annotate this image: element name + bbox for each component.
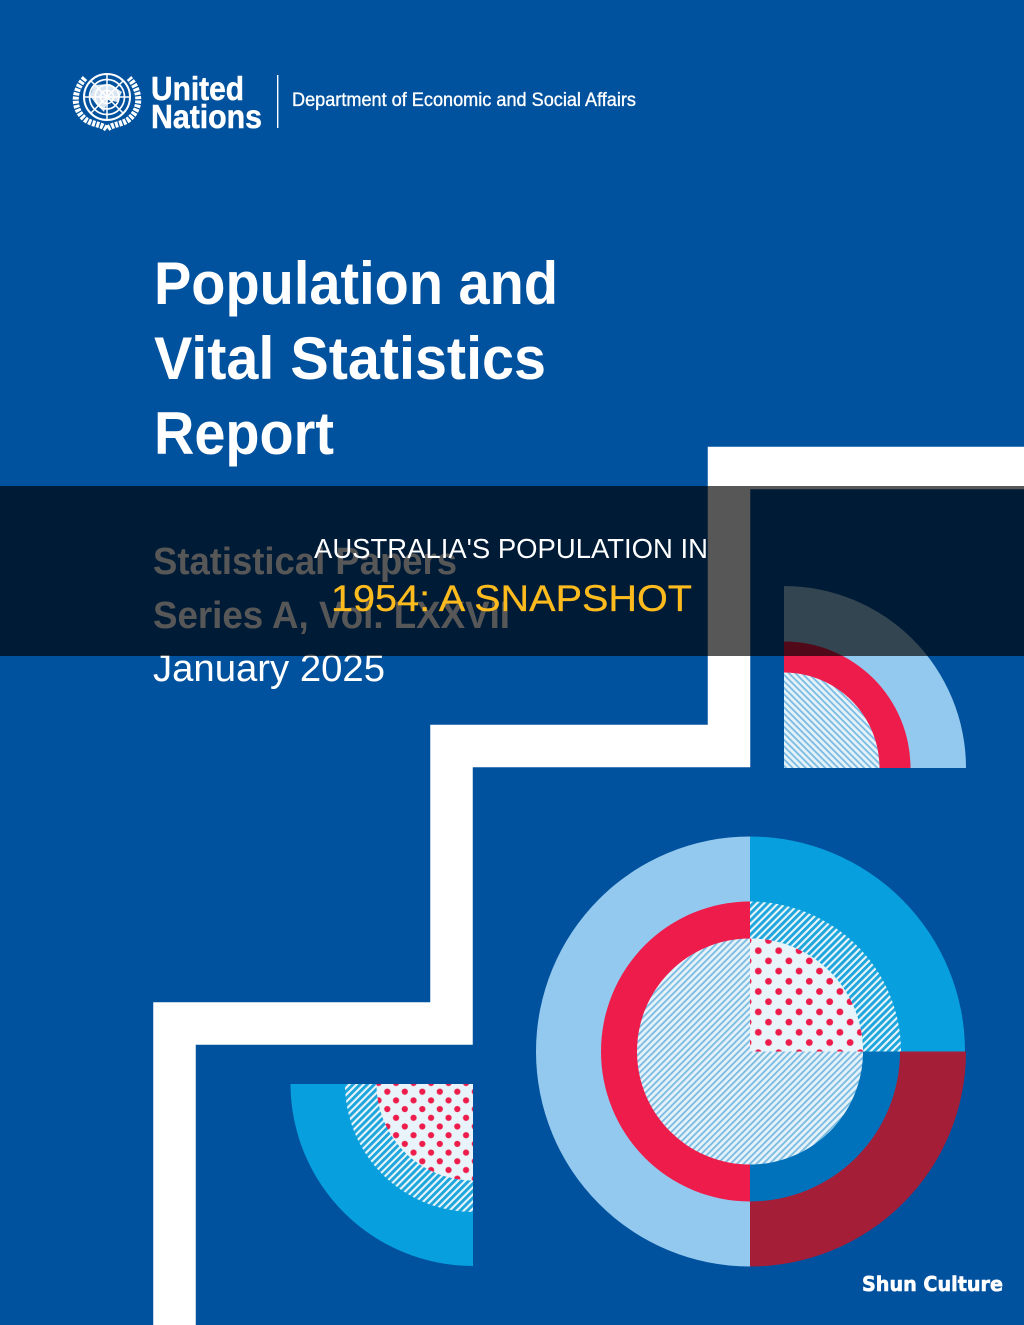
series and date text: Statistical Papers [153,541,457,583]
UN logo and department name [76,70,636,135]
logo wordmark: United: United [151,70,244,107]
outer ring, dark red quarter [750,1052,966,1266]
logo wordmark: Nations: Nations [151,98,262,135]
outer ring, cyan quarter [750,836,965,1052]
series and date text [153,541,510,690]
report title: Vital Statistics [154,325,546,392]
department name: Department of Economic and Social Affairs [292,90,636,111]
top quarter-circle graphic [784,586,966,768]
middle ring, blue quarter [750,1052,900,1202]
white stepped line [174,468,1024,1325]
headline line one: AUSTRALIA'S POPULATION IN [314,533,708,564]
bottom-left quarter-circle graphic [290,1084,473,1266]
headline [314,533,708,619]
report title: Report [154,400,334,467]
icon: UN emblem [76,74,138,129]
dark title band [0,486,1024,656]
series and date text: Series A, Vol. LXXVII [153,595,510,637]
brand watermark: Shun Culture [862,1272,1003,1296]
series and date text: January 2025 [153,648,385,690]
inner circle, hatched [637,938,863,1164]
headline line two: 1954: A SNAPSHOT [331,578,692,619]
middle ring, hatched quarter [750,902,901,1052]
outer ring, light blue quarters [536,836,750,1266]
report title: Population and [154,250,558,317]
middle ring, red half [601,902,750,1202]
report title [154,250,558,467]
inner circle, dotted quarter [750,938,863,1052]
large circular graphic [536,836,966,1266]
